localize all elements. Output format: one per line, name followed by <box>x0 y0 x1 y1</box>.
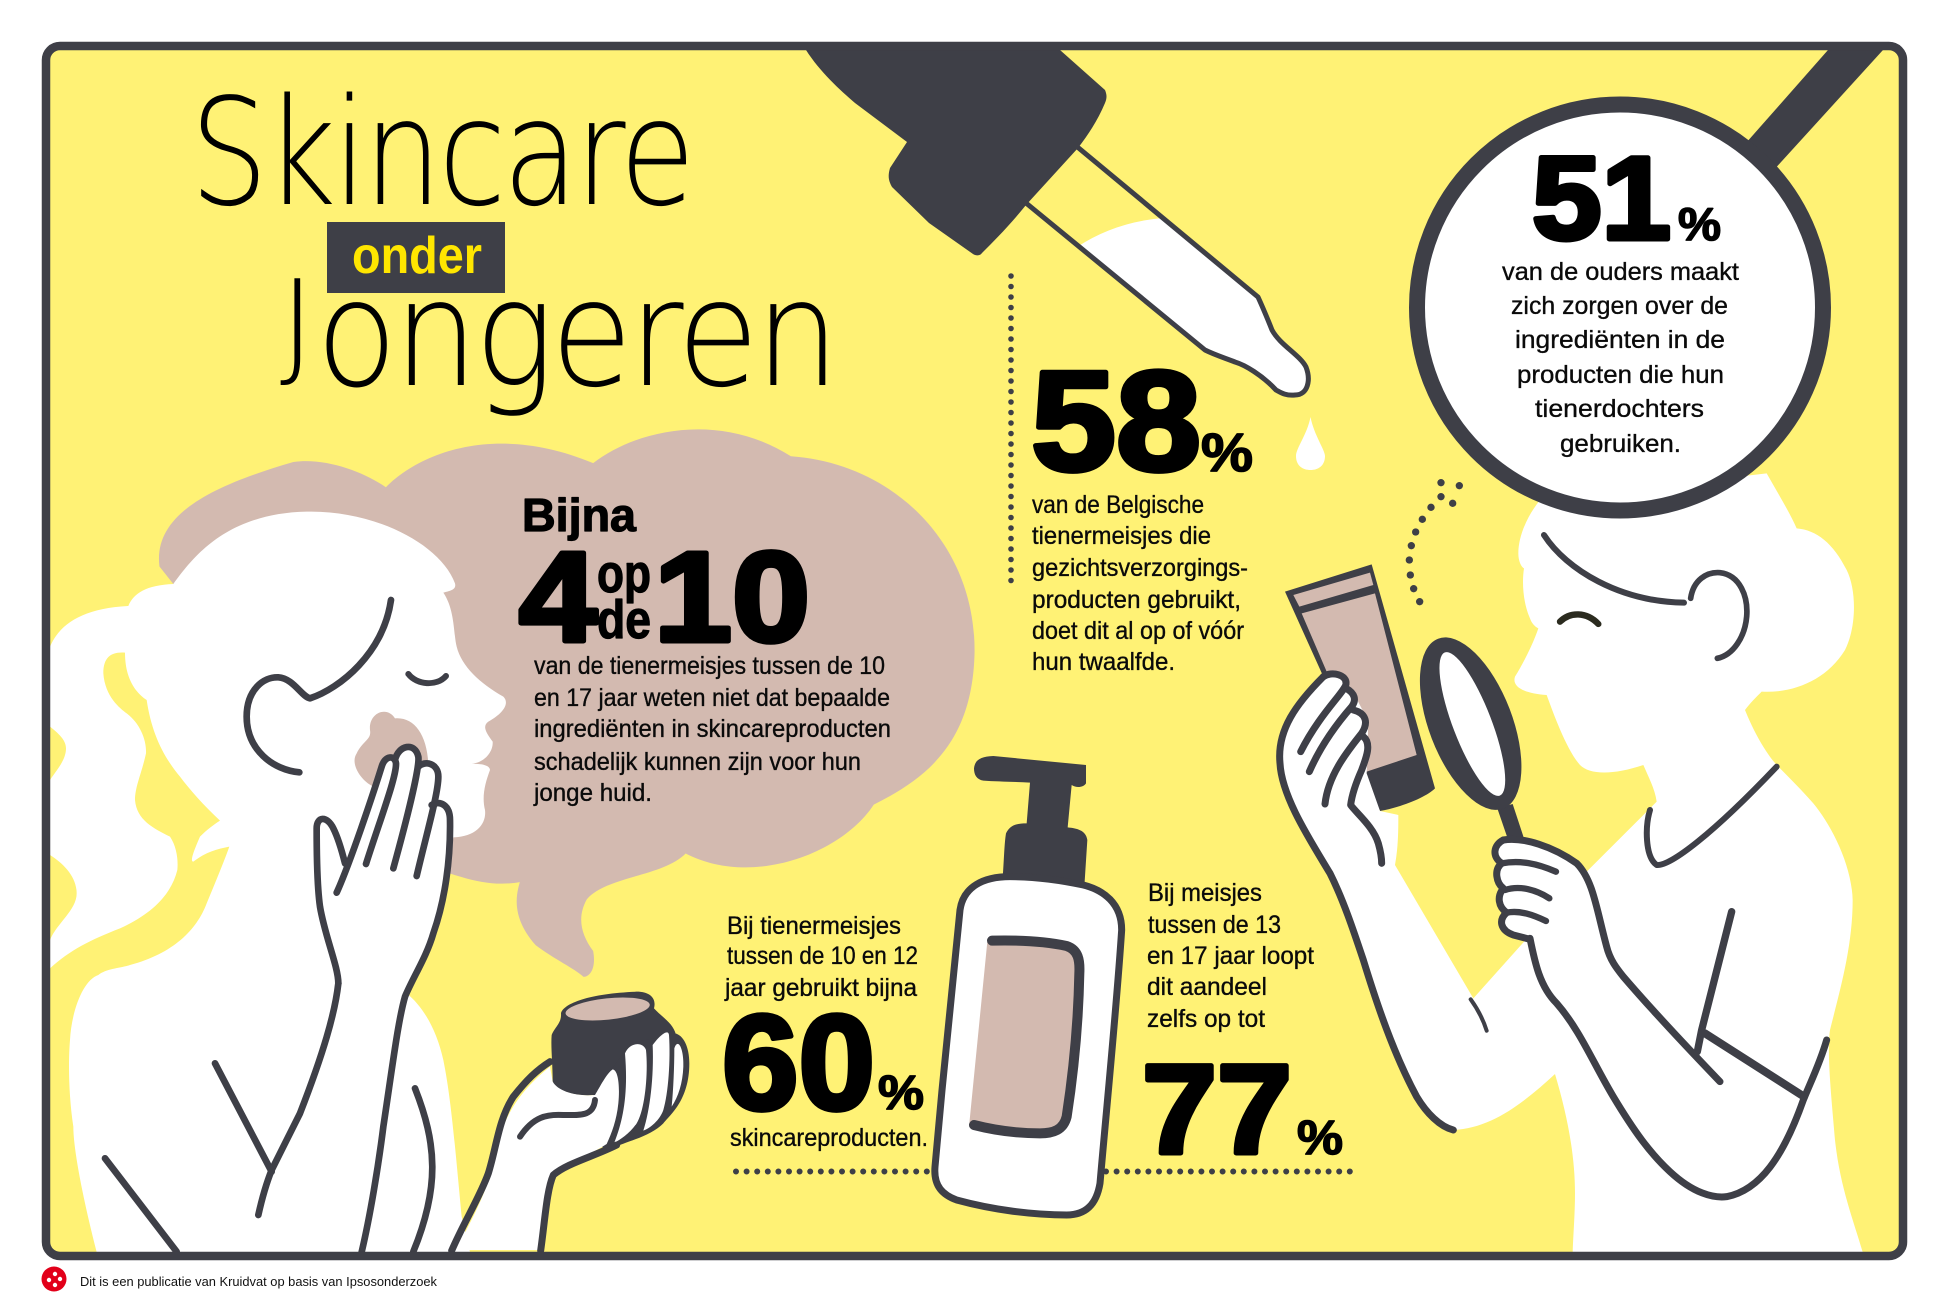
fingers <box>614 1032 683 1143</box>
text: 58% description <box>1032 491 1248 676</box>
title tag box: onder <box>327 222 505 293</box>
text: 51% description: gebruiken. <box>1560 430 1681 458</box>
girl silhouette <box>50 512 506 1252</box>
cheek blemish <box>355 712 428 787</box>
hand outlines <box>452 1062 617 1251</box>
dropper: dark cap <box>806 50 1106 255</box>
stat 51%: % <box>1678 198 1721 250</box>
illustration: girl with hand on cheek <box>50 512 506 1252</box>
pump <box>974 756 1087 887</box>
text: 13 to 17 intro <box>1147 879 1314 1033</box>
stat 51%: 51 <box>1532 133 1671 265</box>
text: 10 to 12 intro: jaar gebruikt bijna <box>724 974 917 1002</box>
text: 13 to 17 intro: zelfs op tot <box>1147 1005 1265 1033</box>
speech cloud: tan <box>159 429 975 977</box>
gripping hand <box>1495 839 1607 1000</box>
text: 4 op de 10 description: en 17 jaar weten niet dat bepaalde <box>534 684 890 712</box>
text: 51% description: van de ouders maakt <box>1502 258 1739 286</box>
palm <box>456 1067 619 1250</box>
text: 13 to 17 intro: dit aandeel <box>1147 973 1267 1001</box>
text: 58% description: gezichtsverzorgings- <box>1032 554 1248 582</box>
smiling eye <box>1560 614 1598 624</box>
dotted baseline left <box>736 1168 928 1174</box>
stat 77%: 77 <box>1142 1038 1292 1180</box>
small magnifying glass <box>1399 624 1542 843</box>
text: 10 to 12 intro <box>724 912 918 1002</box>
bottle body <box>935 877 1122 1215</box>
stat: bijna 4 op de 10 <box>519 489 810 669</box>
text: 58% description: van de Belgische <box>1032 491 1204 519</box>
text: 51% description <box>1502 258 1739 458</box>
water droplet <box>1296 417 1325 470</box>
cream tube <box>1285 564 1435 811</box>
illustration: hand holding cream jar <box>452 992 689 1251</box>
text: 51% description: tienerdochters <box>1535 395 1704 423</box>
hairline <box>1544 535 1684 603</box>
stat 58%: 58 <box>1031 342 1201 501</box>
stat: bijna 4 op de 10: de <box>597 590 651 650</box>
title: ongeren <box>316 248 836 420</box>
finger backing <box>593 1033 689 1152</box>
stat 60%: 60 <box>722 987 875 1138</box>
text: 4 op de 10 description: ingrediënten in skincareproducten <box>534 715 891 743</box>
collar <box>1647 767 1777 865</box>
text: 4 op de 10 description: schadelijk kunnen zijn voor hun <box>534 748 861 776</box>
stat 60%: % <box>878 1067 924 1120</box>
text: 51% description: producten die hun <box>1517 361 1724 389</box>
stat 77%: % <box>1297 1112 1343 1165</box>
upper arm lines and sleeve <box>1495 839 1827 1197</box>
text: 13 to 17 intro: tussen de 13 <box>1148 911 1281 939</box>
big magnifier handle <box>1746 50 1883 172</box>
text: 13 to 17 intro: en 17 jaar loopt <box>1147 942 1314 970</box>
forearm and holding hand <box>1280 674 1555 1130</box>
stat: bijna 4 op de 10: 4 <box>519 526 597 669</box>
text: 13 to 17 intro: Bij meisjes <box>1148 879 1262 907</box>
icon: red logo <box>42 1266 66 1292</box>
text: 58% description: tienermeisjes die <box>1032 522 1211 550</box>
jar body <box>551 992 676 1100</box>
text: 51% description: zich zorgen over de <box>1511 292 1728 320</box>
text: 10 to 12 intro: tussen de 10 en 12 <box>727 942 918 970</box>
title: Skincare <box>190 67 692 239</box>
dotted vertical divider <box>1008 276 1014 584</box>
ear <box>1691 573 1747 658</box>
text: 58% description: hun twaalfde. <box>1032 648 1175 676</box>
ear and jaw line <box>247 600 391 772</box>
stat: bijna 4 op de 10: 10 <box>654 526 810 669</box>
stat: bijna 4 op de 10: Bijna <box>522 489 636 541</box>
stat 58%: % <box>1201 423 1253 483</box>
text: 51% description: ingrediënten in de <box>1515 326 1725 354</box>
title tag box: onder: onder <box>352 227 482 285</box>
title: J <box>280 254 311 392</box>
text: 10 to 12 intro: Bij tienermeisjes <box>727 912 901 940</box>
dropper: pipette outline <box>1026 145 1308 395</box>
bottle label <box>969 942 1078 1131</box>
text: 4 op de 10 description: jonge huid. <box>533 779 652 807</box>
text: 4 op de 10 description: van de tienermeisjes tussen de 10 <box>534 652 885 680</box>
text: skincareproducten: skincareproducten. <box>730 1124 928 1152</box>
stat 51% <box>1532 133 1721 265</box>
stat: bijna 4 op de 10: op <box>597 544 651 604</box>
closed eye <box>408 674 446 683</box>
hand on cheek <box>317 747 450 1252</box>
title <box>190 67 836 420</box>
text: 4 op de 10 description <box>533 652 891 807</box>
dotted arc <box>1406 479 1463 605</box>
dropper: pipette glass white fill <box>1077 218 1308 395</box>
illustration: pump bottle <box>935 756 1122 1215</box>
arm outline and fingers <box>1280 674 1487 1130</box>
jar cream <box>564 994 651 1024</box>
text: 58% description: producten gebruikt, <box>1032 586 1241 614</box>
body contour lines <box>105 983 432 1252</box>
illustration: woman with magnifying glass <box>1280 473 1863 1252</box>
dotted baseline right <box>1106 1168 1350 1174</box>
woman silhouette <box>1473 473 1863 1252</box>
footer source line: Dit is een publicatie van Kruidvat op basis van Ipsosonderzoek <box>80 1274 437 1289</box>
text: 58% description: doet dit al op of vóór <box>1032 617 1244 645</box>
label edge <box>974 941 1079 1133</box>
big magnifier circle <box>1417 104 1823 510</box>
